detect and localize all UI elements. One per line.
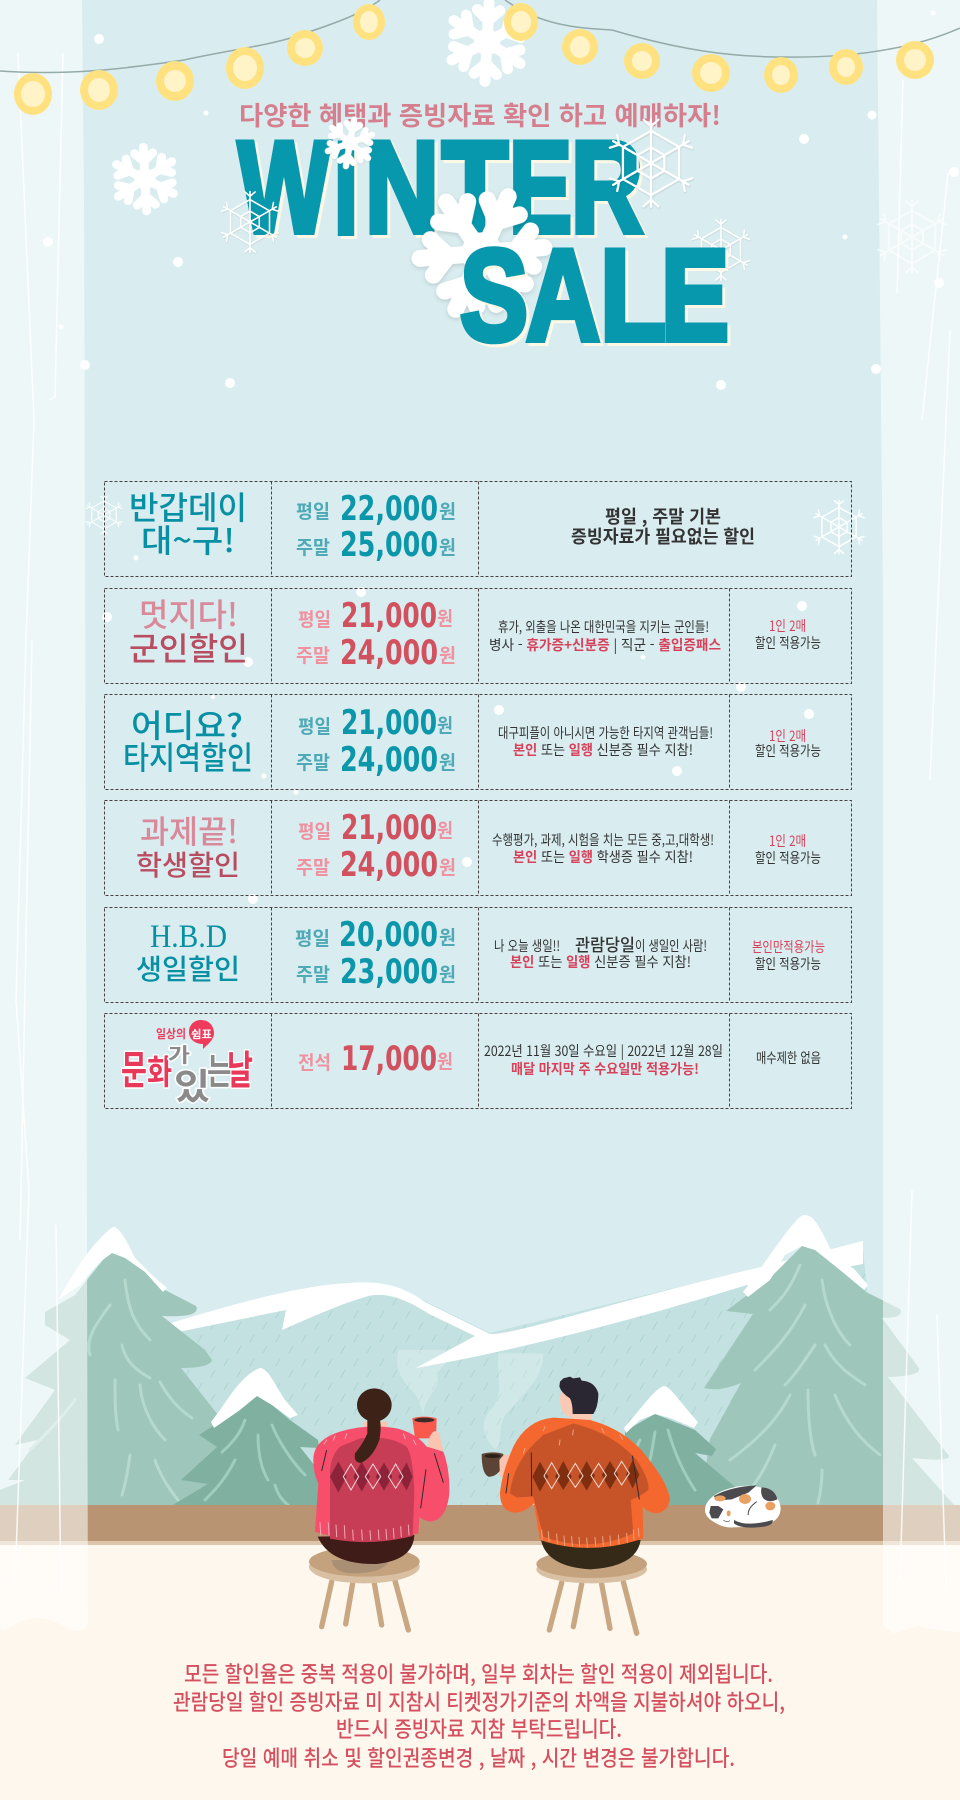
row name: 어디요? bbox=[131, 701, 243, 747]
icon: web snowflake right of WINTER bbox=[609, 119, 693, 207]
prices: 24,000 bbox=[340, 740, 438, 780]
mountain range with snow bbox=[100, 1241, 872, 1506]
heading: WINTER: T bbox=[442, 114, 508, 260]
limit: 할인 적용가능 bbox=[755, 954, 821, 974]
row name: H.B.D bbox=[150, 919, 227, 955]
prices: 원 bbox=[439, 853, 456, 880]
limit bbox=[755, 726, 821, 761]
row name: 멋지다! bbox=[139, 590, 238, 636]
row name bbox=[129, 590, 248, 670]
logo: culture day: 화 bbox=[147, 1045, 172, 1094]
prices bbox=[296, 808, 456, 885]
row name: 생일할인 bbox=[136, 948, 240, 988]
prices: 평일 bbox=[298, 817, 331, 844]
footer notice: 관람당일 할인 증빙자료 미 지참시 티켓정가기준의 차액을 지불하셔야 하오니, bbox=[173, 1685, 785, 1717]
description: 나 오늘 생일!! bbox=[494, 936, 560, 956]
description bbox=[494, 931, 707, 972]
footer notice bbox=[173, 1657, 785, 1773]
prices: 주말 bbox=[296, 853, 330, 880]
icon: web snowflake behind SALE bbox=[692, 220, 750, 280]
wall ledge bbox=[0, 1505, 960, 1545]
prices: 원 bbox=[439, 960, 456, 987]
icon: snowflake left bbox=[111, 145, 179, 213]
footer notice: 당일 예매 취소 및 할인권종변경 , 날짜 , 시간 변경은 불가합니다. bbox=[222, 1741, 735, 1773]
limit: 할인 적용가능 bbox=[755, 633, 821, 653]
prices: 평일 bbox=[295, 924, 330, 951]
prices: 24,000 bbox=[340, 633, 438, 673]
subtitle: 다양한 혜택과 증빙자료 확인 하고 예매하자! bbox=[239, 96, 721, 133]
logo: culture day: 문 bbox=[121, 1038, 147, 1096]
panel: other region discount row bbox=[104, 694, 852, 790]
prices: 원 bbox=[439, 497, 456, 524]
description: 2022년 11월 30일 수요일 | 2022년 12월 28일 bbox=[484, 1041, 723, 1061]
heading: WINTER: W bbox=[238, 114, 330, 260]
prices: 원 bbox=[439, 641, 456, 668]
prices: 원 bbox=[439, 923, 456, 950]
description: 병사 - 휴가증+신분증 | 직군 - 출입증패스 bbox=[489, 635, 721, 655]
prices: 원 bbox=[437, 711, 453, 738]
heading: SALE: A bbox=[526, 222, 600, 368]
limit: 1인 2매 bbox=[769, 616, 806, 636]
description: 수행평가, 과제, 시험을 치는 모든 중,고,대학생! bbox=[492, 830, 714, 850]
heading: SALE: E bbox=[661, 222, 729, 368]
row name: 학생할인 bbox=[136, 844, 240, 884]
prices: 21,000 bbox=[341, 808, 437, 848]
limit: 할인 적용가능 bbox=[755, 848, 821, 868]
left curtain bbox=[0, 0, 88, 1631]
prices: 20,000 bbox=[339, 915, 438, 955]
right curtain bbox=[877, 0, 960, 1634]
logo: culture day: 있 bbox=[174, 1058, 210, 1110]
description bbox=[484, 1041, 723, 1079]
panel: military discount row bbox=[104, 588, 852, 684]
prices: 원 bbox=[437, 816, 453, 843]
limit bbox=[752, 937, 825, 974]
prices: 25,000 bbox=[340, 525, 438, 565]
description bbox=[498, 723, 713, 760]
description: 본인 또는 일행 신분증 필수 지참! bbox=[513, 740, 693, 760]
icon: large snowflake behind SALE bbox=[399, 170, 565, 336]
icon: snowflake outline right curtain bbox=[878, 201, 946, 273]
description: 평일 , 주말 기본 bbox=[605, 503, 721, 529]
icon: snowflake on WINTER bbox=[323, 116, 377, 170]
logo: culture day: 일상의 bbox=[156, 1025, 186, 1042]
row name: 군인할인 bbox=[129, 624, 248, 670]
man on stool bbox=[482, 1353, 670, 1633]
small right pine tree bbox=[624, 1386, 750, 1506]
row name: 타지역할인 bbox=[123, 733, 253, 779]
row name bbox=[129, 483, 247, 562]
string lights bbox=[0, 0, 960, 115]
description: 매달 마지막 주 수요일만 적용가능! bbox=[511, 1059, 699, 1079]
prices bbox=[296, 596, 456, 673]
logo: culture day: 날 bbox=[227, 1038, 253, 1096]
footer notice: 반드시 증빙자료 지참 부탁드립니다. bbox=[336, 1712, 622, 1744]
small left pine tree bbox=[171, 1368, 340, 1506]
heading: SALE: S bbox=[460, 222, 528, 368]
description: 휴가, 외출을 나온 대한민국을 지키는 군인들! bbox=[498, 617, 709, 637]
prices: 주말 bbox=[296, 641, 330, 668]
prices: 주말 bbox=[296, 533, 330, 560]
heading: WINTER bbox=[238, 114, 643, 261]
panel: culture day discount row bbox=[104, 1014, 852, 1110]
heading: SALE bbox=[460, 222, 729, 368]
footer notice: 모든 할인율은 중복 적용이 불가하며, 일부 회차는 할인 적용이 제외됩니다. bbox=[184, 1657, 773, 1689]
description bbox=[571, 503, 755, 549]
price: 17,000 bbox=[341, 1039, 437, 1079]
logo: culture day: 가 bbox=[168, 1039, 190, 1068]
prices: 21,000 bbox=[341, 596, 437, 636]
falling snow dots bbox=[43, 10, 959, 904]
limit bbox=[755, 831, 821, 868]
floor bbox=[0, 1545, 960, 1800]
icon: snowflake top bbox=[445, 0, 529, 84]
panel: birthday discount row bbox=[104, 908, 852, 1002]
prices: 원 bbox=[439, 533, 456, 560]
description bbox=[489, 617, 721, 655]
description: 본인 또는 일행 신분증 필수 지참! bbox=[510, 952, 691, 972]
heading: SALE: L bbox=[600, 222, 666, 368]
prices: 21,000 bbox=[341, 703, 437, 743]
price: 원 bbox=[437, 1047, 453, 1074]
limit: 본인만적용가능 bbox=[752, 937, 825, 957]
prices: 원 bbox=[439, 748, 456, 775]
limit: 매수제한 없음 bbox=[756, 1048, 821, 1068]
price bbox=[298, 1039, 453, 1079]
heading: WINTER: E bbox=[509, 114, 572, 260]
prices: 평일 bbox=[296, 497, 330, 524]
icon: snowflake table left bbox=[86, 496, 122, 534]
row name bbox=[136, 919, 240, 988]
description: 증빙자료가 필요없는 할인 bbox=[571, 523, 755, 549]
prices bbox=[295, 915, 456, 992]
limit: 할인 적용가능 bbox=[755, 741, 821, 761]
prices bbox=[296, 703, 456, 780]
row name: 대~구! bbox=[141, 516, 235, 562]
icon: sleeping cat bbox=[705, 1485, 781, 1528]
icon: web snowflake left of WINTER bbox=[221, 192, 279, 252]
description bbox=[492, 830, 714, 867]
prices: 주말 bbox=[296, 748, 330, 775]
limit bbox=[755, 616, 821, 653]
price: 전석 bbox=[298, 1048, 331, 1075]
logo: culture day: 쉼표 bbox=[191, 1026, 212, 1042]
row name: 반갑데이 bbox=[129, 483, 247, 529]
heading: WINTER: I bbox=[334, 115, 358, 261]
prices: 23,000 bbox=[340, 952, 438, 992]
icon: snowflake table right bbox=[814, 500, 864, 554]
prices: 평일 bbox=[298, 712, 331, 739]
prices: 주말 bbox=[296, 960, 330, 987]
prices: 평일 bbox=[298, 605, 331, 632]
heading: WINTER: N bbox=[365, 114, 439, 260]
description: 관람당일 bbox=[575, 931, 635, 956]
limit: 1인 2매 bbox=[769, 831, 806, 851]
prices: 24,000 bbox=[340, 845, 438, 885]
prices bbox=[296, 489, 456, 565]
limit: 1인 2매 bbox=[769, 726, 806, 746]
row name bbox=[136, 807, 240, 884]
prices: 원 bbox=[437, 604, 453, 631]
panel: basic discount row bbox=[104, 482, 852, 576]
woman on stool bbox=[309, 1350, 457, 1630]
logo: culture day: 는 bbox=[207, 1043, 232, 1095]
description: 이 생일인 사람! bbox=[635, 936, 707, 956]
prices: 22,000 bbox=[340, 489, 438, 529]
logo: culture day bbox=[121, 1020, 253, 1110]
row name: 과제끝! bbox=[140, 807, 238, 853]
description: 대구피플이 아니시면 가능한 타지역 관객님들! bbox=[498, 723, 713, 743]
panel: student discount row bbox=[104, 800, 852, 896]
row name bbox=[123, 701, 253, 779]
illustration: mountain landscape and people bbox=[0, 1215, 960, 1800]
heading: WINTER: R bbox=[571, 114, 643, 260]
description: 본인 또는 일행 학생증 필수 지참! bbox=[513, 847, 693, 867]
big left pine tree bbox=[0, 1227, 262, 1506]
big right pine tree bbox=[700, 1215, 955, 1506]
